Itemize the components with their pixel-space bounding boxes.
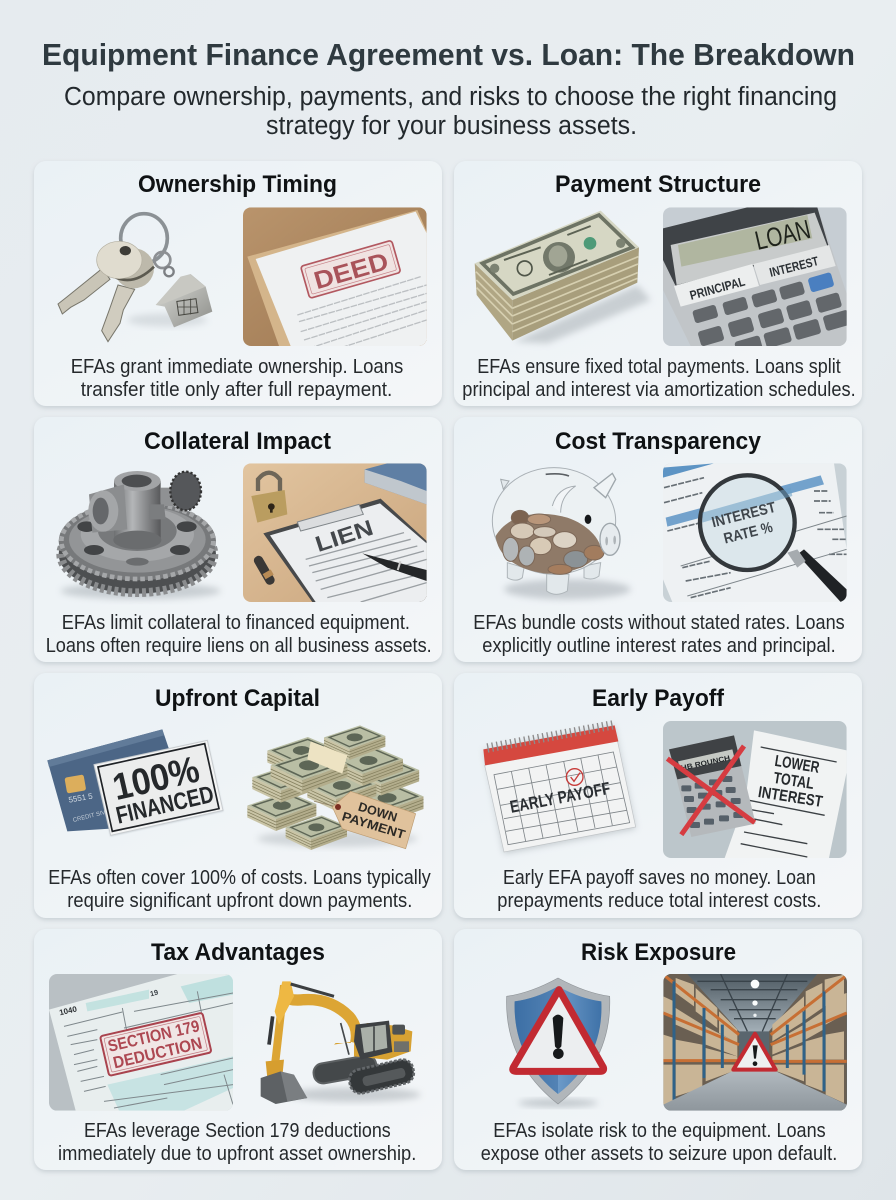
photo: crossed out calculator and lower total interest xyxy=(663,721,847,858)
photo: deed document: DEED xyxy=(311,248,392,295)
panel: payment structure xyxy=(454,161,862,406)
icon: credit card and 100% financed sign xyxy=(47,729,223,835)
description: ownership timing: transfer title only after full repayment. xyxy=(81,378,392,401)
icon: stack of dollar bills xyxy=(475,211,651,343)
description: risk exposure: EFAs isolate risk to the equipment. Loans xyxy=(493,1119,826,1142)
photo: loan calculator: PRINCIPAL xyxy=(688,275,747,303)
photo: crossed out calculator and lower total interest: LOWER xyxy=(773,753,821,777)
description: early payoff: Early EFA payoff saves no money. Loan xyxy=(503,866,816,889)
description: cost transparency xyxy=(473,611,845,657)
icon: credit card and 100% financed sign: CREDIT SIV xyxy=(72,810,106,824)
description: tax advantages: immediately due to upfront asset ownership. xyxy=(58,1142,416,1165)
description: payment structure: EFAs ensure fixed total payments. Loans split xyxy=(477,355,841,378)
description: tax advantages: EFAs leverage Section 179 deductions xyxy=(84,1119,391,1142)
photo: tax form section 179 deduction: 1040 xyxy=(58,1004,78,1017)
photo: tax form section 179 deduction: 19 xyxy=(149,988,159,998)
description: cost transparency: EFAs bundle costs without stated rates. Loans xyxy=(473,611,845,634)
description: risk exposure xyxy=(481,1119,837,1165)
description: early payoff: prepayments reduce total interest costs. xyxy=(497,889,821,912)
icon: house keys xyxy=(58,214,212,342)
heading: early payoff: Early Payoff xyxy=(592,685,725,712)
subtitle: strategy for your business assets. xyxy=(266,112,637,140)
photo: crossed out calculator and lower total interest: TOTAL xyxy=(772,770,815,793)
description: cost transparency: explicitly outline interest rates and principal. xyxy=(482,634,836,657)
icon: calendar early payoff xyxy=(483,725,636,854)
description: upfront capital: EFAs often cover 100% of costs. Loans typically xyxy=(48,866,431,889)
photo: loan calculator xyxy=(663,207,852,357)
description: ownership timing xyxy=(71,355,403,401)
description: tax advantages xyxy=(58,1119,416,1165)
description: collateral impact: Loans often require liens on all business assets. xyxy=(46,634,432,657)
photo: lien clipboard and padlock xyxy=(243,463,427,602)
heading: upfront capital: Upfront Capital xyxy=(155,685,320,712)
description: upfront capital: require significant upfront down payments. xyxy=(67,889,412,912)
description: collateral impact xyxy=(46,611,432,657)
icon: calendar early payoff: EARLY PAYOFF xyxy=(508,778,612,817)
icon: pile of cash with down payment tag xyxy=(247,725,423,850)
description: risk exposure: expose other assets to seizure upon default. xyxy=(481,1142,837,1165)
icon: shield with warning triangle xyxy=(507,978,610,1107)
heading: collateral impact: Collateral Impact xyxy=(144,428,331,455)
description: early payoff xyxy=(497,866,821,912)
photo: tax form section 179 deduction: SECTION 179 xyxy=(106,1016,201,1056)
panel: ownership timing xyxy=(34,161,442,406)
icon: credit card and 100% financed sign: 100% xyxy=(109,748,203,808)
subtitle: Compare ownership, payments, and risks to choose the right financing xyxy=(64,83,837,111)
heading: cost transparency: Cost Transparency xyxy=(555,428,762,455)
photo: crossed out calculator and lower total interest: HB ROUNCH xyxy=(680,753,731,772)
description: payment structure xyxy=(462,355,856,401)
photo: interest rate under magnifier: INTEREST xyxy=(710,499,778,531)
subtitle xyxy=(64,83,837,140)
icon: credit card and 100% financed sign: 5551 5 xyxy=(68,791,94,805)
icon: yellow excavator xyxy=(261,981,421,1104)
photo: loan calculator: INTEREST xyxy=(768,254,820,280)
title: Equipment Finance Agreement vs. Loan: The Breakdown xyxy=(42,37,855,72)
panel: upfront capital xyxy=(34,673,442,918)
heading: risk exposure: Risk Exposure xyxy=(581,939,736,966)
icon: pile of cash with down payment tag: PAYMENT xyxy=(340,809,407,842)
photo: interest rate under magnifier xyxy=(663,463,847,602)
photo: lien clipboard and padlock: LIEN xyxy=(312,515,376,557)
photo: loan calculator: LOAN xyxy=(752,214,813,256)
panel: risk exposure xyxy=(454,929,862,1170)
photo: deed document xyxy=(243,207,427,350)
description: collateral impact: EFAs limit collateral to financed equipment. xyxy=(62,611,410,634)
icon: pile of cash with down payment tag: DOWN xyxy=(356,800,399,825)
description: ownership timing: EFAs grant immediate ownership. Loans xyxy=(71,355,403,378)
panel: early payoff xyxy=(454,673,862,918)
panel: collateral impact xyxy=(34,417,442,662)
description: upfront capital xyxy=(48,866,431,912)
photo: warehouse aisle with warning sign xyxy=(663,974,847,1111)
icon: glass piggy bank xyxy=(492,468,631,599)
icon: metal gear xyxy=(59,471,221,599)
panel: cost transparency xyxy=(454,417,862,662)
panel: tax advantages xyxy=(34,929,442,1170)
description: payment structure: principal and interest via amortization schedules. xyxy=(462,378,856,401)
heading: tax advantages: Tax Advantages xyxy=(151,939,325,966)
photo: tax form section 179 deduction xyxy=(49,974,233,1111)
heading: ownership timing: Ownership Timing xyxy=(138,171,337,198)
photo: tax form section 179 deduction: DEDUCTION xyxy=(111,1033,204,1072)
photo: interest rate under magnifier: RATE % xyxy=(722,519,775,547)
photo: crossed out calculator and lower total interest: INTEREST xyxy=(757,784,824,811)
icon: credit card and 100% financed sign: FINANCED xyxy=(114,781,216,830)
heading: payment structure: Payment Structure xyxy=(555,171,761,198)
